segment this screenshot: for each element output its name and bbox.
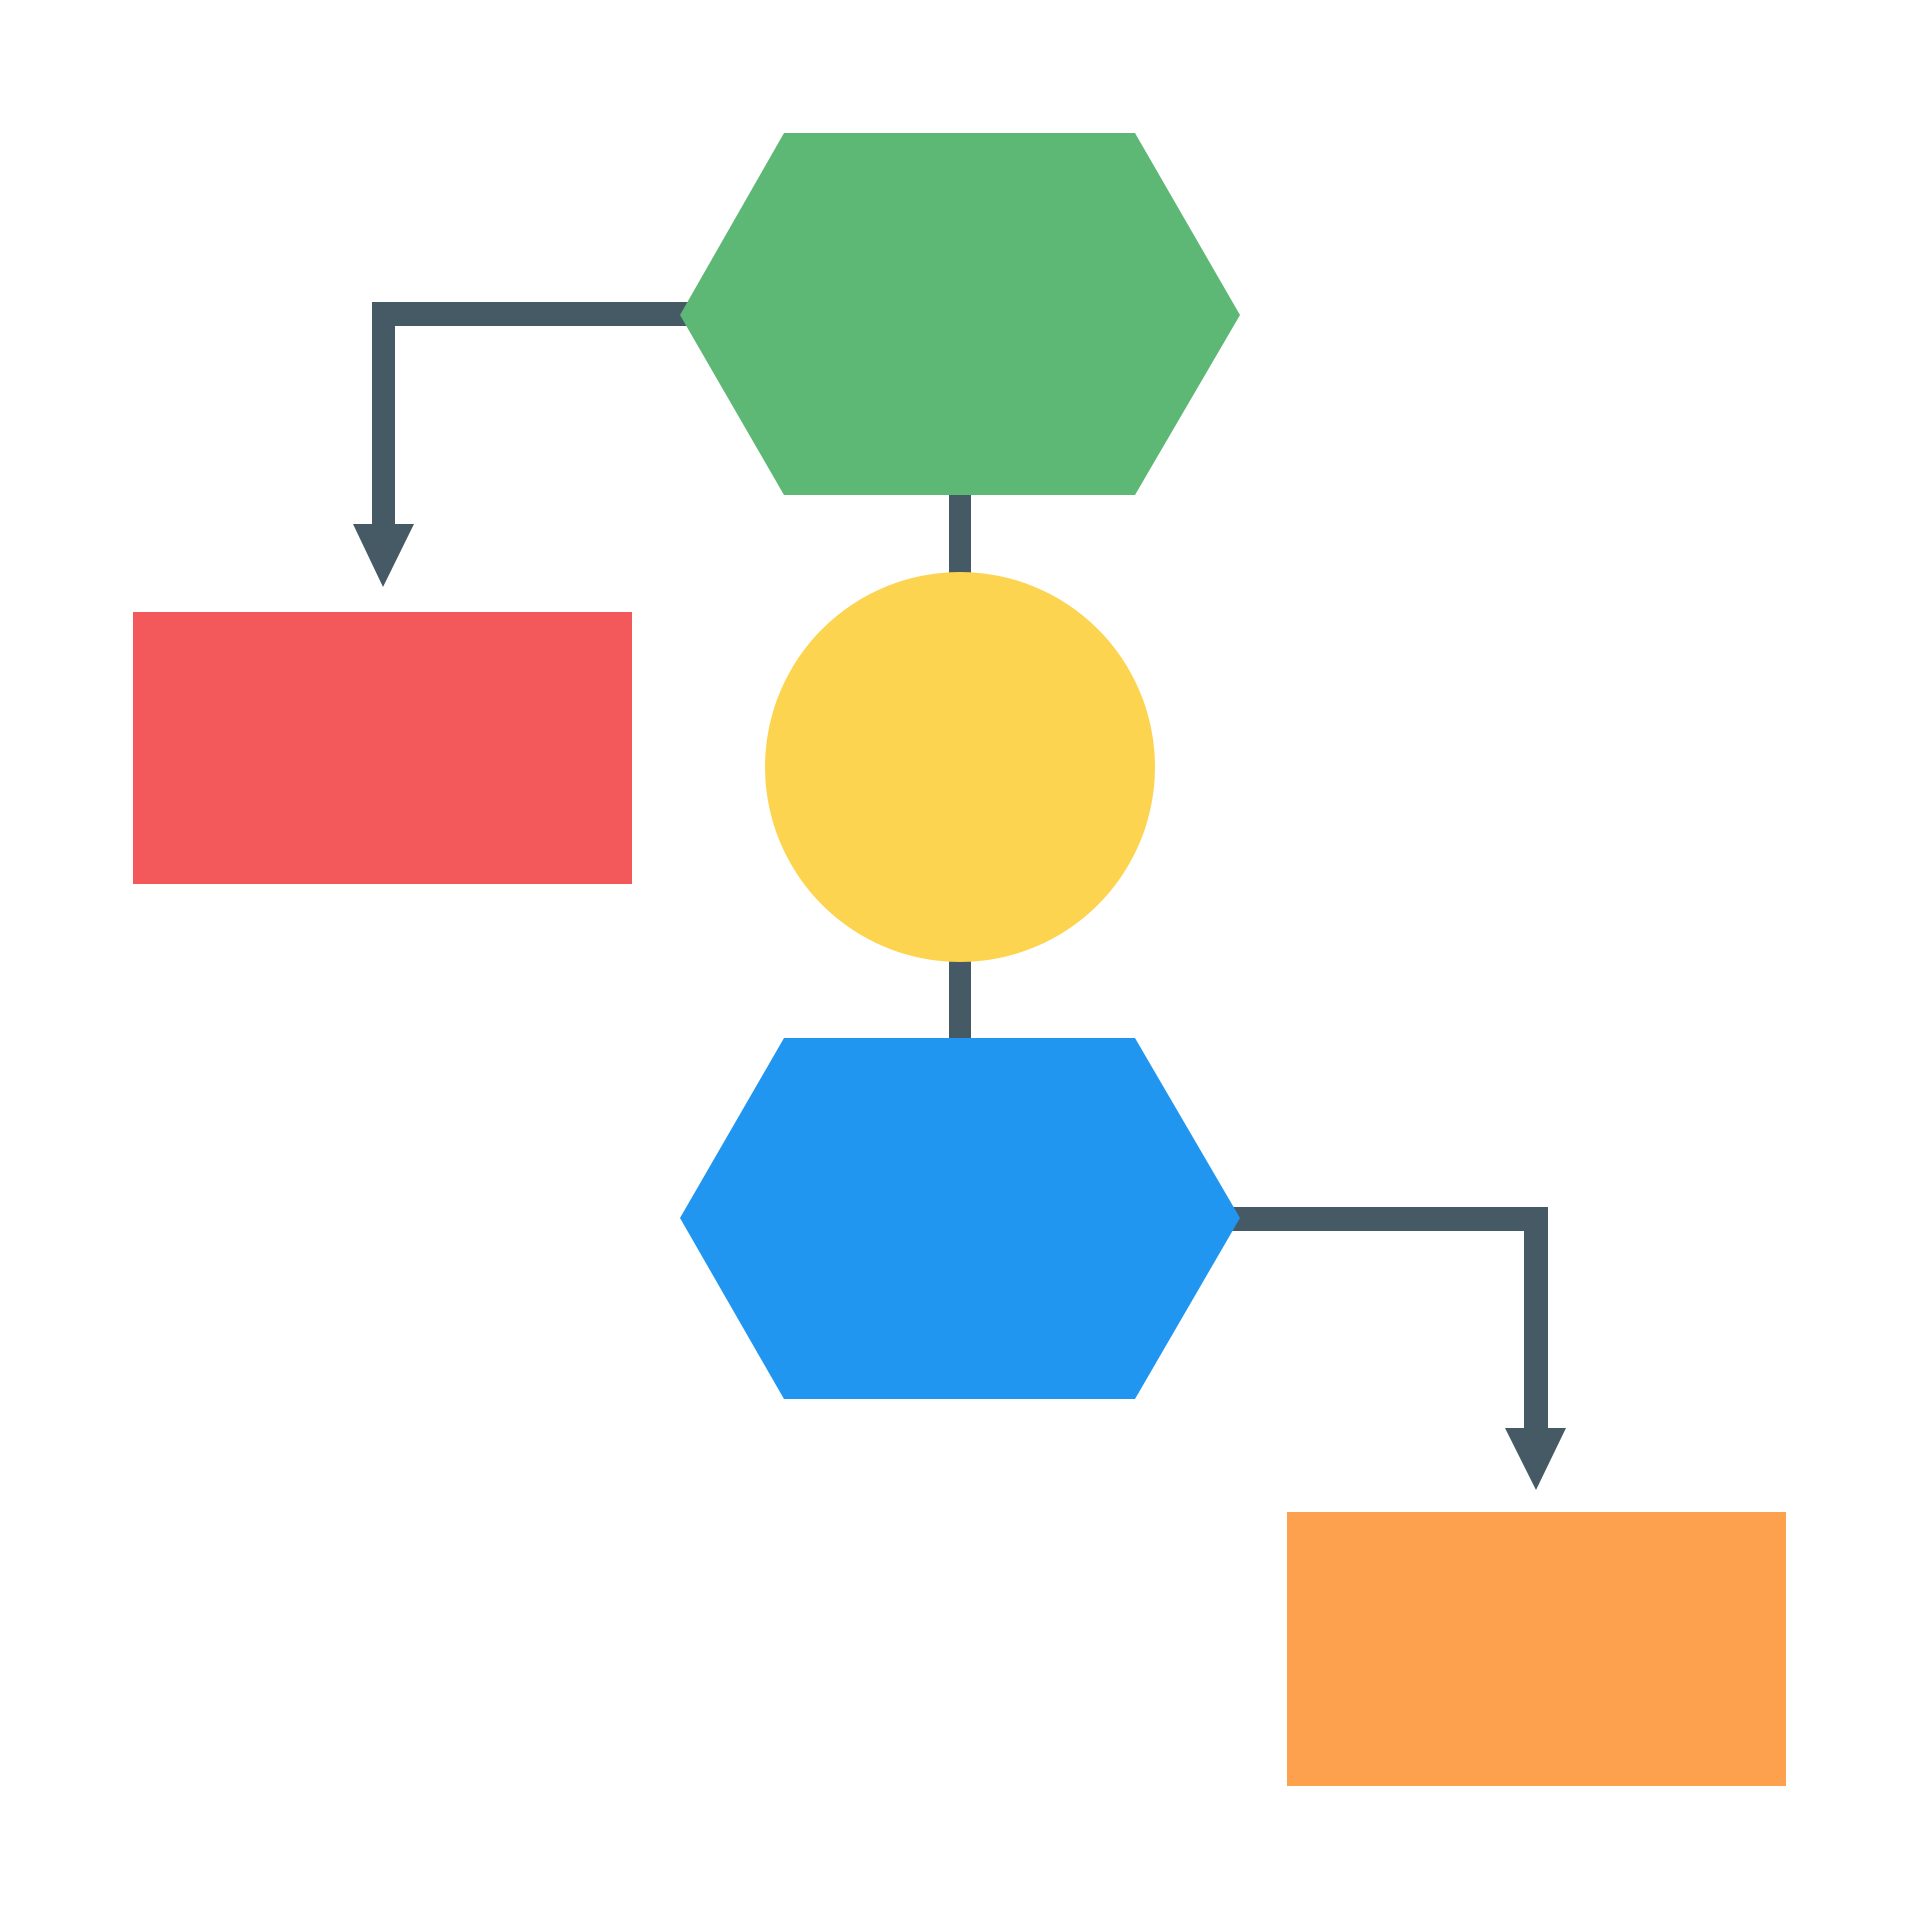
arrow: blue hexagon to orange box — [1225, 1207, 1566, 1490]
red box — [133, 612, 632, 884]
connector: vertical center line — [949, 480, 971, 1050]
orange box — [1287, 1512, 1786, 1786]
yellow circle — [765, 572, 1155, 962]
green hexagon — [680, 133, 1240, 495]
arrow: green hexagon to red box — [353, 302, 692, 587]
blue hexagon — [680, 1038, 1240, 1399]
